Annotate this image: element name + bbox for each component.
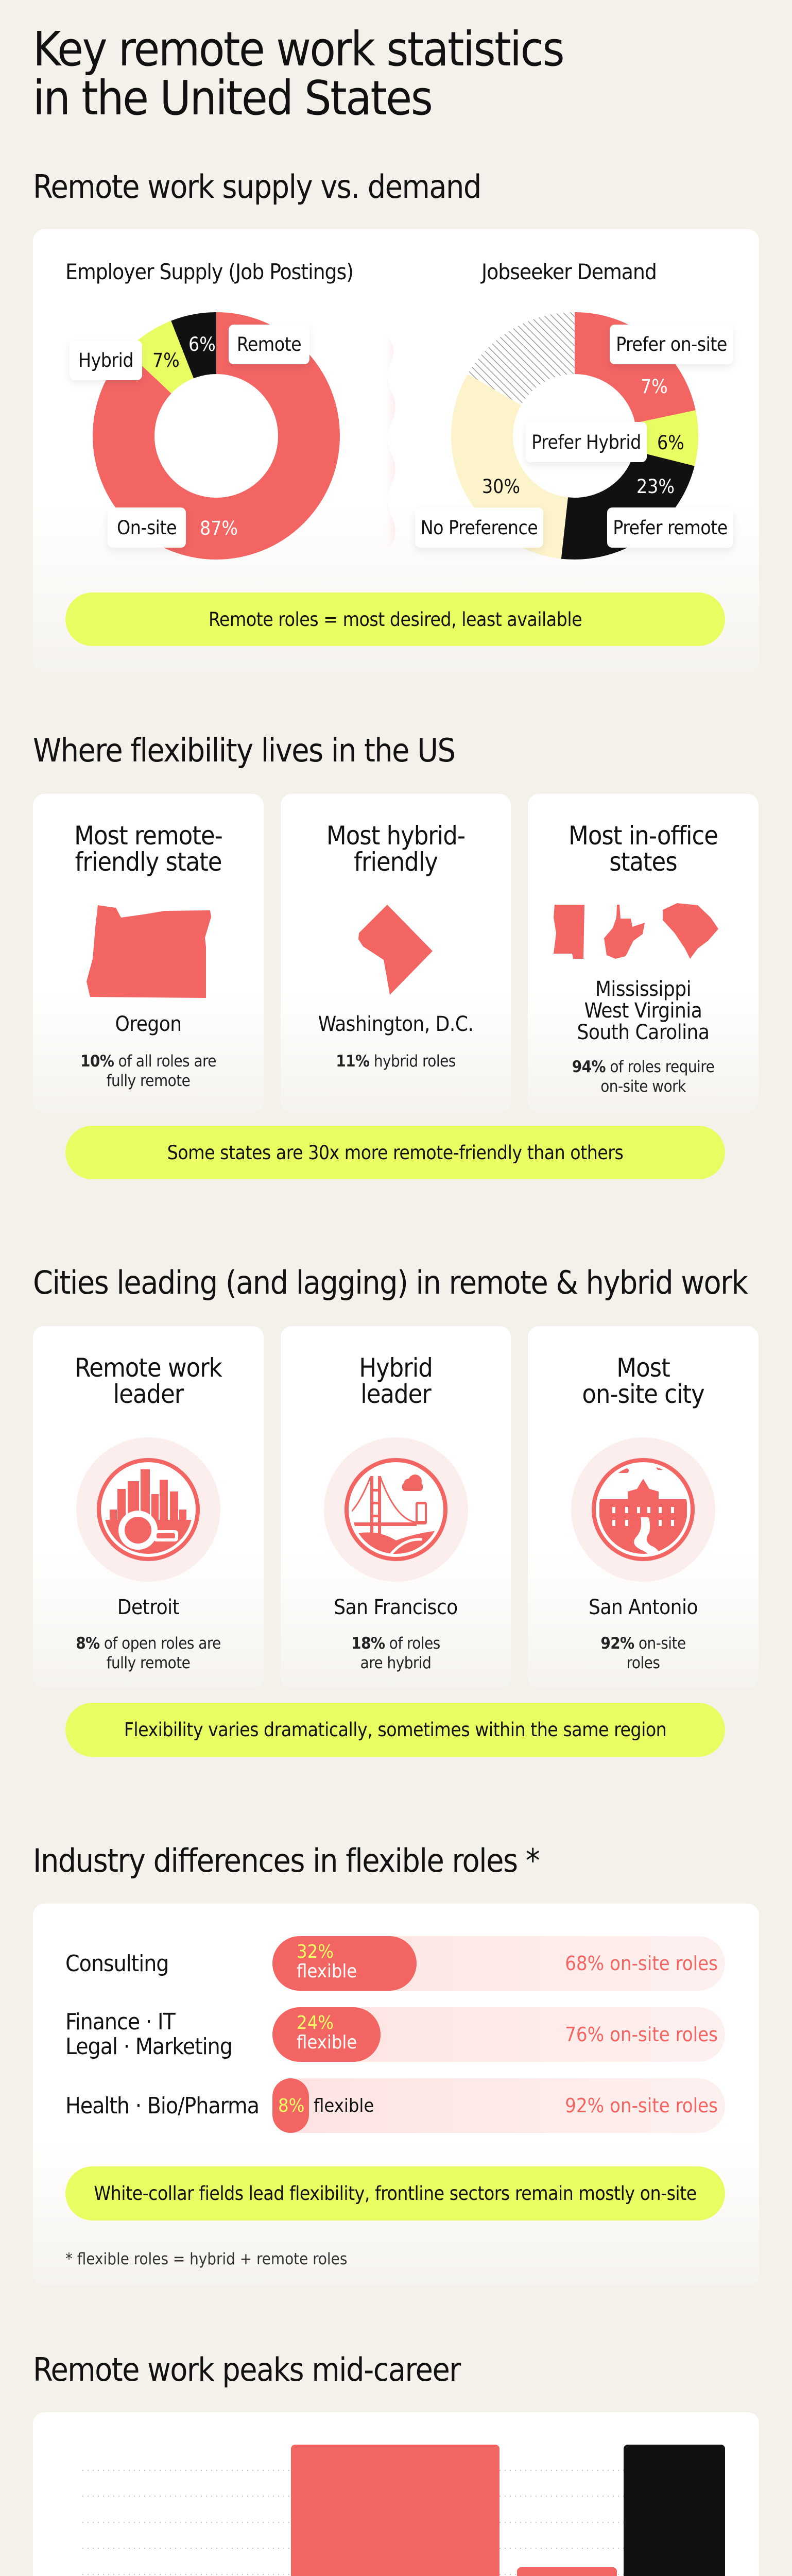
row: health bio/pharma: Health · Bio/Pharma	[65, 2093, 259, 2119]
pill: cities takeaway	[65, 1703, 725, 1757]
label: prefer hybrid: Prefer Hybrid	[531, 431, 641, 453]
panel: mid-career bar chart	[33, 2412, 759, 2576]
pct: 7% demand: 7%	[641, 376, 668, 398]
heading: industry: Industry differences in flexible roles *	[33, 1842, 539, 1879]
icon: Golden Gate bridge	[324, 1437, 468, 1582]
label: prefer remote	[607, 507, 733, 548]
label: prefer hybrid	[526, 422, 647, 462]
row: consulting: flexible	[297, 1961, 357, 1982]
subtitle: jobseeker demand: Jobseeker Demand	[481, 259, 657, 284]
heading: cities: Cities leading (and lagging) in remote & hybrid work	[33, 1264, 747, 1301]
names: West Virginia	[584, 999, 702, 1023]
pct: 23%: 23%	[636, 476, 675, 498]
title	[33, 22, 563, 126]
description	[80, 1052, 216, 1090]
card title: Most hybrid-	[326, 821, 465, 851]
icon: Alamo	[571, 1437, 715, 1582]
heading: mid-career: Remote work peaks mid-career	[33, 2351, 460, 2388]
card title: states	[609, 847, 677, 877]
card: most remote-friendly state	[33, 794, 264, 1112]
city name: San Antonio	[589, 1596, 698, 1619]
label: hybrid	[70, 341, 142, 380]
heading: where flexibility lives: Where flexibility lives in the US	[33, 732, 455, 769]
pill: industry takeaway: White-collar fields lead flexibility, frontline sectors remain mostly on-site	[94, 2182, 697, 2205]
bar: 4% remote	[517, 2567, 617, 2576]
description: on-site work	[600, 1077, 686, 1096]
row: health bio/pharma: 92% on-site roles	[565, 2094, 718, 2117]
pill: states takeaway	[65, 1126, 725, 1179]
card title	[359, 1353, 433, 1409]
label: prefer on-site: Prefer on-site	[616, 333, 727, 355]
card title: leader	[360, 1379, 431, 1409]
card: most hybrid-friendly	[281, 794, 511, 1112]
icon: three state maps	[554, 903, 718, 959]
label: remote: Remote	[237, 333, 301, 355]
icon: DC map	[358, 905, 433, 995]
card title	[569, 821, 718, 877]
city name: San Francisco	[334, 1596, 458, 1619]
panel: industry bars	[33, 1904, 759, 2286]
description: 18% of roles	[351, 1634, 440, 1653]
bar chart	[82, 2445, 725, 2576]
label: prefer remote: Prefer remote	[613, 516, 728, 539]
description: 10% of all roles are	[80, 1052, 216, 1071]
pill: cities takeaway: Flexibility varies dramatically, sometimes within the same region	[124, 1719, 666, 1741]
card: San Antonio	[528, 1326, 759, 1688]
card: Detroit	[33, 1326, 264, 1688]
card title: Most in-office	[569, 821, 718, 851]
names	[577, 977, 709, 1044]
row: health bio/pharma: 8%	[278, 2095, 304, 2116]
label: on-site	[108, 507, 186, 548]
label: on-site: On-site	[117, 516, 177, 539]
footnote: * flexible roles = hybrid + remote roles	[65, 2250, 347, 2268]
row: finance IT legal marketing: Finance · IT	[65, 2009, 175, 2035]
label: hybrid: Hybrid	[78, 349, 133, 371]
heading: supply vs demand: Remote work supply vs. demand	[33, 168, 481, 206]
description	[600, 1634, 686, 1672]
card title: friendly	[354, 847, 438, 877]
description	[351, 1634, 440, 1672]
icon: Oregon map	[87, 905, 211, 998]
description	[572, 1058, 714, 1096]
pill: supply vs demand takeaway	[65, 592, 725, 646]
title: Key remote work statistics	[33, 22, 563, 77]
state name: Oregon	[115, 1012, 182, 1036]
card title: on-site city	[582, 1379, 704, 1409]
label: no preference: No Preference	[421, 516, 538, 539]
pill: industry takeaway	[65, 2166, 725, 2221]
card title: Hybrid	[359, 1353, 433, 1383]
description: 94% of roles require	[572, 1058, 714, 1076]
pct: 7%: 7%	[152, 349, 180, 371]
description: are hybrid	[360, 1654, 431, 1672]
names: Mississippi	[595, 977, 691, 1001]
card title	[326, 821, 465, 877]
description: 11% hybrid roles	[336, 1052, 456, 1071]
description: 92% on-site	[600, 1634, 686, 1653]
divider wave	[381, 330, 395, 546]
pct: 87%: 87%	[200, 517, 238, 539]
row: consulting: 32%	[297, 1941, 334, 1962]
donut: employer supply	[124, 343, 309, 529]
description: roles	[627, 1654, 660, 1672]
label: prefer on-site	[610, 325, 733, 364]
description: fully remote	[107, 1654, 190, 1672]
city name: Detroit	[117, 1596, 179, 1619]
bar: 9% hybrid	[624, 2445, 725, 2576]
card title: Remote work	[75, 1353, 222, 1383]
label: remote	[229, 325, 309, 364]
donut: jobseeker demand	[482, 343, 667, 529]
label: no preference	[415, 507, 543, 548]
row: consulting	[65, 1936, 725, 1991]
description: fully remote	[107, 1072, 190, 1090]
pill: states takeaway: Some states are 30x more remote-friendly than others	[167, 1142, 623, 1163]
card title: friendly state	[75, 847, 221, 877]
row: consulting: Consulting	[65, 1951, 168, 1977]
pct: 6%: 6%	[188, 333, 216, 355]
panel: supply vs demand	[33, 229, 759, 672]
pct: 30%: 30%	[482, 476, 520, 498]
subtitle: employer supply: Employer Supply (Job Postings)	[65, 259, 353, 284]
card title	[74, 821, 222, 877]
bar: 9% remote work peak	[291, 2445, 500, 2576]
description	[76, 1634, 221, 1672]
card: San Francisco	[281, 1326, 511, 1688]
card title: Most remote-	[74, 821, 222, 851]
card title: leader	[113, 1379, 183, 1409]
icon: Detroit skyline	[76, 1437, 220, 1582]
card: most in-office states	[528, 794, 759, 1112]
row: health bio/pharma: flexible	[314, 2095, 374, 2116]
description: 8% of open roles are	[76, 1634, 221, 1653]
donut charts	[93, 312, 698, 560]
row: finance IT legal marketing: 76% on-site roles	[565, 2023, 718, 2046]
row: finance IT legal marketing	[65, 2007, 725, 2062]
pct: 6% demand: 6%	[657, 432, 684, 454]
card title	[75, 1353, 222, 1409]
row: finance IT legal marketing: 24%	[297, 2012, 334, 2033]
row: finance IT legal marketing: Legal · Marketing	[65, 2033, 232, 2060]
name: Washington, D.C.	[318, 1012, 473, 1036]
row: consulting: 68% on-site roles	[565, 1952, 718, 1975]
card title	[582, 1353, 704, 1409]
names: South Carolina	[577, 1021, 709, 1044]
row: finance IT legal marketing: flexible	[297, 2032, 357, 2053]
card title: Most	[616, 1353, 670, 1383]
title: in the United States	[33, 71, 432, 126]
row: health bio/pharma	[65, 2078, 725, 2133]
pill: supply vs demand takeaway: Remote roles = most desired, least available	[209, 608, 582, 631]
